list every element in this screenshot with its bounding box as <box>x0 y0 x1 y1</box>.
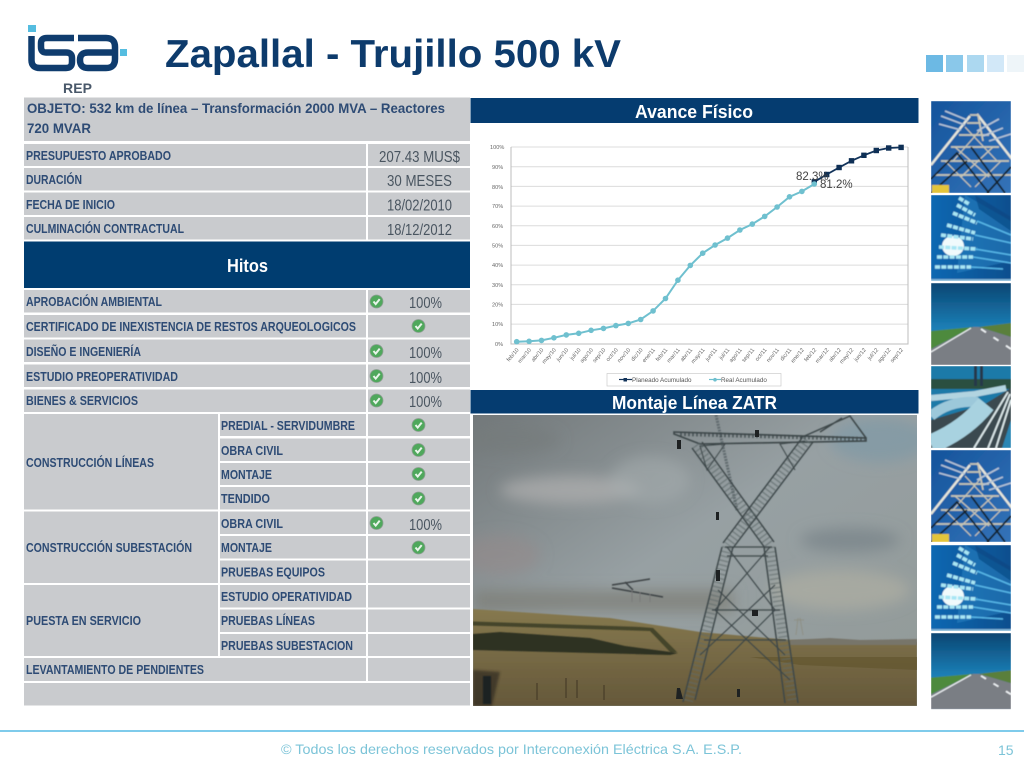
x axis labels: mar/12 <box>815 347 831 365</box>
milestone labels: CONSTRUCCIÓN LÍNEAS <box>26 455 154 470</box>
x axis labels: mar/11 <box>666 347 682 364</box>
row: fecha de inicio: FECHA DE INICIO <box>26 198 115 212</box>
milestone labels: PREDIAL - SERVIDUMBRE <box>221 419 355 433</box>
x axis labels: dic/10 <box>630 347 645 363</box>
heading: Avance Fisico <box>470 98 918 123</box>
milestone percentages: 100% <box>409 295 442 312</box>
x axis labels: jun/12 <box>853 347 868 364</box>
y axis labels: 10% <box>492 322 503 328</box>
row: fecha de inicio: 18/02/2010 <box>387 198 452 214</box>
y axis labels: 30% <box>492 283 503 289</box>
y axis labels <box>490 145 504 348</box>
row: culminacion: CULMINACIÓN CONTRACTUAL <box>26 221 184 236</box>
y axis labels: 70% <box>492 204 503 210</box>
thumbnail: fibre optics repeat <box>931 545 1011 631</box>
milestone labels: APROBACIÓN AMBIENTAL <box>26 294 162 309</box>
thumbnail: road repeat <box>931 633 1011 709</box>
milestone percentages: 100% <box>409 370 442 387</box>
x axis labels: ago/10 <box>579 347 595 364</box>
milestone percentages: 100% <box>409 517 442 534</box>
x axis labels: mar/10 <box>517 347 533 365</box>
x axis labels: abr/11 <box>680 347 694 363</box>
milestone labels: ESTUDIO PREOPERATIVIDAD <box>26 370 178 384</box>
value label planned: 82.3% <box>796 171 829 183</box>
objective row: 720 MVAR <box>27 120 91 136</box>
chart gridlines <box>511 147 908 344</box>
main tower <box>674 416 866 703</box>
x axis labels: sep/11 <box>741 347 756 364</box>
thumbnail: road <box>931 283 1011 365</box>
milestone labels: ESTUDIO OPERATIVIDAD <box>221 590 352 604</box>
y axis labels: 0% <box>495 342 503 348</box>
row: duracion: 30 MESES <box>387 173 452 190</box>
x axis labels: abr/12 <box>828 347 843 363</box>
thumbnail: fibre optics <box>931 195 1011 281</box>
y axis labels: 40% <box>492 263 503 269</box>
series: real acumulado <box>517 184 814 342</box>
milestone labels: MONTAJE <box>221 541 272 555</box>
x axis labels: sep/12 <box>890 347 905 364</box>
objective row <box>24 98 470 141</box>
logo: ISA REP <box>28 25 127 96</box>
milestone labels: MONTAJE <box>221 468 272 482</box>
line chart: physical progress <box>471 123 918 389</box>
x axis labels: jul/12 <box>866 347 880 362</box>
milestone grid cells <box>24 290 470 706</box>
milestone labels: PRUEBAS LÍNEAS <box>221 613 315 628</box>
y axis labels: 60% <box>492 224 503 230</box>
x axis labels: sep/10 <box>592 347 607 364</box>
thumbnail: tower repeat <box>931 450 1012 542</box>
row: culminacion <box>24 217 470 240</box>
value label actual: 81.2% <box>820 179 853 191</box>
x axis labels: abr/10 <box>531 347 545 363</box>
y axis labels: 90% <box>492 165 503 171</box>
milestone labels: OBRA CIVIL <box>221 517 283 531</box>
logo: ISA REP: REP <box>63 80 92 96</box>
footer copyright: © Todos los derechos reservados por Interconexión Eléctrica S.A. E.S.P. <box>281 741 742 757</box>
thumbnail: pipelines <box>931 366 1011 448</box>
x axis labels: ago/12 <box>877 347 893 364</box>
page number: 15 <box>998 742 1014 758</box>
row: presupuesto: 207.43 MUS$ <box>379 149 460 166</box>
milestone percentages <box>409 295 442 534</box>
objective row: OBJETO: 532 km de línea – Transformación 2000 MVA – Reactores <box>27 100 445 116</box>
chart legend <box>607 374 781 386</box>
x axis labels: oct/10 <box>605 347 620 363</box>
chart legend: Real Acumulado <box>721 377 767 384</box>
thumbnail: tower <box>931 101 1012 193</box>
row: duracion <box>24 168 470 190</box>
x axis labels <box>506 347 905 365</box>
milestone percentages: 100% <box>409 394 442 411</box>
heading: Montaje Linea ZATR <box>470 390 918 414</box>
milestone labels: PUESTA EN SERVICIO <box>26 614 141 628</box>
photo strip: thumbnails <box>931 101 1012 709</box>
milestone labels: LEVANTAMIENTO DE PENDIENTES <box>26 663 204 677</box>
milestone labels: BIENES & SERVICIOS <box>26 394 138 408</box>
workers and ground objects <box>483 430 759 704</box>
row: culminacion: 18/12/2012 <box>387 222 452 239</box>
x axis labels: jun/10 <box>555 347 570 364</box>
x axis labels: may/12 <box>839 347 855 365</box>
photo: transmission tower under construction <box>460 415 930 706</box>
x axis labels: feb/12 <box>804 347 818 363</box>
y axis labels: 20% <box>492 302 503 308</box>
footer rule <box>0 730 1024 732</box>
x axis labels: dic/11 <box>779 347 793 362</box>
milestone labels: CONSTRUCCIÓN SUBESTACIÓN <box>26 540 192 555</box>
title: Zapallal - Trujillo 500 kV <box>165 33 621 76</box>
y axis labels: 80% <box>492 185 503 191</box>
row: duracion: DURACIÓN <box>26 172 82 187</box>
x axis labels: jun/11 <box>704 347 719 363</box>
hitos heading: Hitos <box>227 256 268 276</box>
x axis labels: nov/11 <box>766 347 781 364</box>
x axis labels: ene/11 <box>642 347 657 364</box>
milestone labels: TENDIDO <box>221 492 270 506</box>
hitos heading <box>24 242 470 288</box>
chart legend: Planeado Acumulado <box>632 377 692 384</box>
row: presupuesto: PRESUPUESTO APROBADO <box>26 149 171 163</box>
icons: status check marks <box>370 295 425 554</box>
x axis labels: jul/10 <box>569 347 583 362</box>
milestone labels <box>26 294 356 677</box>
background tower <box>612 415 804 635</box>
series: planeado acumulado <box>814 147 901 182</box>
x axis labels: feb/11 <box>655 347 669 363</box>
x axis labels: jul/11 <box>718 347 731 362</box>
x axis labels: may/10 <box>541 347 558 365</box>
x axis labels: ene/12 <box>790 347 806 364</box>
x axis labels: nov/10 <box>617 347 632 364</box>
y axis labels: 50% <box>492 244 503 250</box>
heading: Montaje Linea ZATR: Montaje Línea ZATR <box>612 393 777 413</box>
milestone labels: PRUEBAS SUBESTACION <box>221 639 353 653</box>
milestone labels: OBRA CIVIL <box>221 444 283 458</box>
panel: project data table <box>24 98 470 706</box>
x axis labels: oct/11 <box>754 347 769 363</box>
row: fecha de inicio <box>24 192 470 215</box>
decorative squares header <box>926 55 1024 72</box>
x axis labels: feb/10 <box>506 347 521 363</box>
heading: Avance Fisico: Avance Físico <box>635 102 753 122</box>
milestone percentages: 100% <box>409 345 442 362</box>
y axis labels: 100% <box>490 145 504 151</box>
milestone labels: CERTIFICADO DE INEXISTENCIA DE RESTOS ARQUEOLOGICOS <box>26 320 356 334</box>
row: presupuesto <box>24 144 470 166</box>
x axis labels: ago/11 <box>728 347 744 364</box>
milestone labels: PRUEBAS EQUIPOS <box>221 566 325 580</box>
milestone labels: DISEÑO E INGENIERÍA <box>26 344 141 359</box>
x axis labels: may/11 <box>690 347 707 365</box>
